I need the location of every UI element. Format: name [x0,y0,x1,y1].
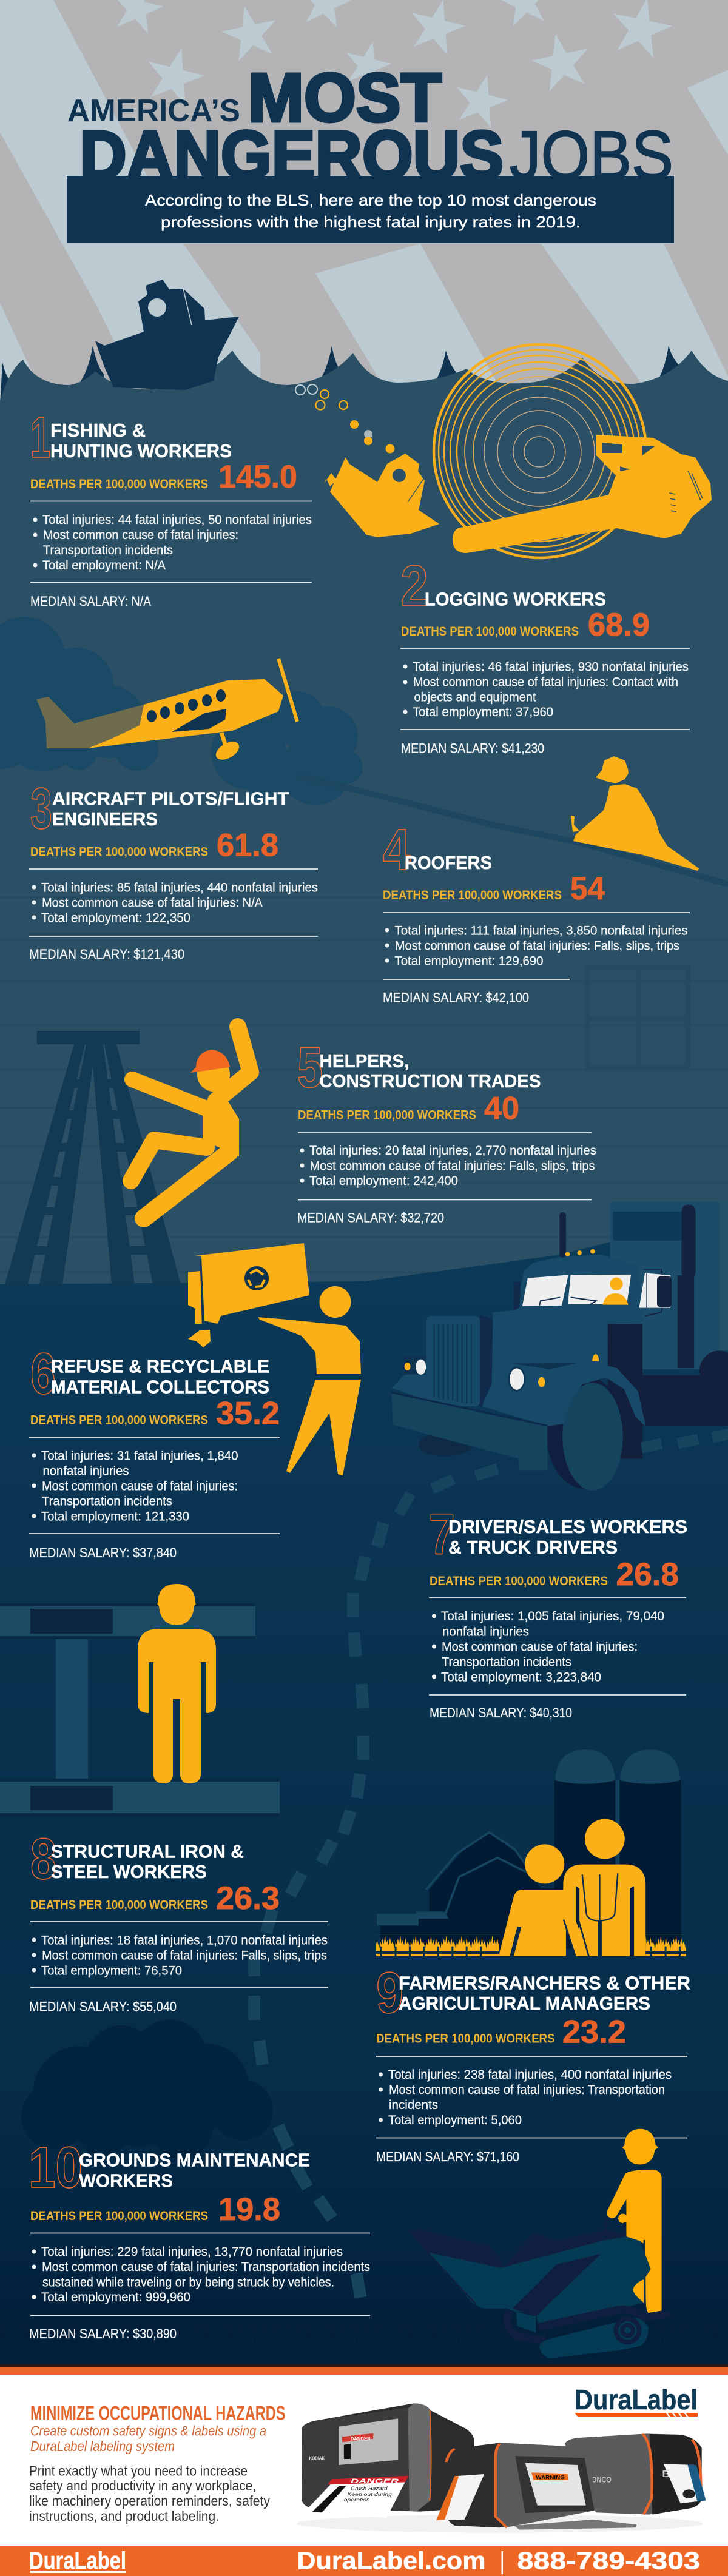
icon: steel worker [138,1584,216,1783]
rank number 9: 9 [376,1961,403,2025]
deaths value: 61.8 [217,827,278,864]
heading: HUNTING WORKERS [50,440,232,461]
heading: FARMERS/RANCHERS & OTHER [399,1972,690,1994]
rank number 4: 4 [383,817,411,882]
injury facts: Total employment: N/A [42,558,166,572]
median salary: MEDIAN SALARY: $42,100 [383,990,529,1005]
title: MOST [248,59,442,136]
clouds behind the plane [0,617,363,805]
heading [448,1516,687,1558]
injury facts: Most common cause of fatal injuries: Falls, slips, trips [395,939,679,953]
phone number: 888-789-4303 [517,2547,700,2575]
printer: Bronco front [436,2443,637,2530]
panel: driver/sales workers and truck drivers [429,1501,687,1720]
injury facts: Total employment: 121,330 [41,1510,189,1523]
rank number 8: 8 [30,1826,56,1891]
title [67,59,673,193]
panel: helpers, construction trades [297,1035,596,1225]
heading [319,1050,541,1092]
footer: contact bar [0,2546,728,2576]
injury facts: Total injuries: 31 fatal injuries, 1,840 [41,1449,238,1463]
deaths value: 35.2 [216,1396,280,1431]
deaths label: DEATHS PER 100,000 WORKERS [30,844,208,859]
injury facts [32,1933,328,1978]
deaths label: DEATHS PER 100,000 WORKERS [430,1574,608,1588]
deaths label: DEATHS PER 100,000 WORKERS [30,1897,208,1912]
injury facts: nonfatal injuries [42,1464,129,1478]
icon: chainsaw [453,435,712,553]
injury facts: Most common cause of fatal injuries: Transportation [389,2083,665,2097]
promo subheading: DuraLabel labeling system [30,2438,175,2454]
median salary: MEDIAN SALARY: N/A [30,594,151,609]
heading [50,420,232,461]
injury facts [403,660,689,719]
heading: DRIVER/SALES WORKERS [448,1516,687,1537]
deaths label: DEATHS PER 100,000 WORKERS [30,477,208,491]
promo subheading: Create custom safety signs & labels using a [30,2423,266,2439]
road dashes [248,1428,728,2298]
injury facts: Total employment: 37,960 [413,705,553,719]
heading: CONSTRUCTION TRADES [319,1070,541,1092]
injury facts [33,513,312,572]
heading: STEEL WORKERS [51,1861,207,1882]
deaths value: 23.2 [562,2014,626,2050]
icon: ladder [5,1031,181,1284]
background: grass [0,2313,728,2364]
heading: REFUSE & RECYCLABLE [51,1356,269,1377]
heading: AGRICULTURAL MANAGERS [399,1993,650,2014]
title: AMERICA’S [67,93,240,129]
panel: logging workers [400,554,690,756]
printer: Kodiak: KODIAK [309,2456,325,2461]
rank number 7: 7 [429,1501,455,1567]
injury facts [385,924,688,968]
icon: farm and farmers [376,1749,686,1957]
injury facts: Most common cause of fatal injuries: [43,528,238,542]
heading: HELPERS, [319,1050,409,1072]
icon: recycling worker [258,1286,361,1475]
injury facts [432,1609,664,1685]
icon: tree silhouette [21,2019,273,2159]
intro text box [67,176,674,243]
promo heading: MINIMIZE OCCUPATIONAL HAZARDS [30,2403,285,2424]
median salary: MEDIAN SALARY: $55,040 [29,1999,177,2014]
icon: recycling bin [188,1243,309,1347]
icon: mower worker and mower [408,2129,673,2358]
rank number 2: 2 [400,554,428,619]
printer: Bronco back: BR [662,2469,678,2479]
intro text box: professions with the highest fatal injury rates in 2019. [161,213,581,231]
printer: Bronco back [565,2433,706,2515]
heading [51,1841,244,1882]
heading: AIRCRAFT PILOTS/FLIGHT [52,788,289,809]
heading: LOGGING WORKERS [425,588,606,610]
heading [79,2149,310,2192]
footer: promo panel [0,2375,728,2546]
printers illustration [297,2403,706,2533]
logo: DuraLabel: DuraLabel [575,2384,698,2415]
heading [399,1972,690,2014]
injury facts: Total injuries: 85 fatal injuries, 440 nonfatal injuries [41,880,318,895]
injury facts: objects and equipment [414,690,536,705]
injury facts: Most common cause of fatal injuries: Falls, slips, trips [42,1949,327,1962]
printer: Kodiak: DANGER [351,2477,399,2484]
promo subheading [30,2423,266,2454]
heading [51,1356,269,1397]
printer: Bronco front: WARNING [536,2475,565,2481]
background: house siding [0,897,728,1272]
website: DuraLabel.com [297,2547,485,2575]
injury facts: incidents [389,2098,438,2112]
promo body text: like machinery operation reminders, safety [29,2493,270,2509]
panel: roofers [383,817,690,1005]
injury facts: Total injuries: 1,005 fatal injuries, 79,040 [441,1609,664,1623]
intro text box: According to the BLS, here are the top 10 most dangerous [145,191,596,209]
promo body text [29,2463,270,2524]
rank number 6: 6 [30,1341,56,1406]
injury facts: Most common cause of fatal injuries: [42,1480,238,1493]
injury facts: Total injuries: 238 fatal injuries, 400 nonfatal injuries [388,2068,672,2082]
background: sky and flag [0,0,728,400]
deaths value: 54 [570,871,605,907]
rank number 3: 3 [30,776,52,841]
title: JOBS [510,117,673,193]
deaths value: 68.9 [588,607,650,643]
injury facts: Total injuries: 44 fatal injuries, 50 nonfatal injuries [42,513,312,527]
icon: airplane [36,659,297,763]
injury facts [379,2068,672,2127]
rank number 1: 1 [30,405,50,470]
injury facts: sustained while traveling or by being struck by vehicles. [42,2275,334,2290]
injury facts: Total employment: 3,223,840 [441,1670,601,1685]
icon: fishing boat silhouette [95,280,239,390]
background: night lower section [0,1242,728,2365]
injury facts: Total employment: 122,350 [41,911,190,925]
heading: & TRUCK DRIVERS [448,1537,618,1558]
deaths value: 145.0 [218,459,297,495]
injury facts: Total employment: 5,060 [388,2113,522,2127]
printer: Kodiak [302,2403,474,2518]
heading: GROUNDS MAINTENANCE [79,2149,310,2171]
printer: Bronco back: ONCO [592,2475,612,2484]
injury facts [32,2245,370,2304]
promo body text: safety and productivity in any workplace, [29,2478,256,2494]
median salary: MEDIAN SALARY: $32,720 [297,1210,444,1225]
injury facts: Total injuries: 46 fatal injuries, 930 nonfatal injuries [413,660,689,674]
heading: FISHING & [50,420,146,441]
deaths value: 26.8 [616,1557,679,1592]
injury facts: Total employment: 242,400 [309,1174,458,1188]
deaths label: DEATHS PER 100,000 WORKERS [30,2209,208,2223]
injury facts: nonfatal injuries [442,1625,529,1639]
heading: ROOFERS [405,852,492,873]
deaths value: 26.3 [216,1880,280,1916]
panel: grounds maintenance workers [29,2135,370,2341]
injury facts: Most common cause of fatal injuries: Transportation incidents [42,2260,370,2274]
heading: STRUCTURAL IRON & [51,1841,244,1862]
deaths label: DEATHS PER 100,000 WORKERS [383,888,562,902]
footer: top band [0,2364,728,2375]
median salary: MEDIAN SALARY: $37,840 [29,1545,177,1560]
injury facts: Transportation incidents [42,1494,172,1509]
injury facts: Total injuries: 18 fatal injuries, 1,070 nonfatal injuries [41,1933,328,1948]
injury facts [32,880,318,925]
injury facts: Total employment: 999,960 [41,2290,190,2304]
heading: ENGINEERS [52,808,158,830]
injury facts: Transportation incidents [442,1655,571,1669]
panel: structural iron and steel workers [29,1826,328,2014]
injury facts [300,1144,596,1188]
injury facts: Total injuries: 20 fatal injuries, 2,770 nonfatal injuries [309,1144,596,1158]
injury facts: Total employment: 129,690 [394,954,544,968]
rank number 10: 10 [29,2135,83,2200]
injury facts: Transportation incidents [43,543,173,557]
icon: truck [391,1200,728,1491]
median salary: MEDIAN SALARY: $41,230 [401,741,544,756]
panel: fishing and hunting workers [30,405,312,609]
printer: Kodiak: Keep out during [347,2492,393,2497]
deaths value: 40 [484,1090,519,1127]
deaths label: DEATHS PER 100,000 WORKERS [376,2031,554,2046]
deaths label: DEATHS PER 100,000 WORKERS [298,1107,476,1122]
deaths label: DEATHS PER 100,000 WORKERS [401,624,579,639]
heading [52,788,289,830]
title: DANGEROUS [79,117,504,193]
icon: roofer [571,756,699,871]
house window [587,968,688,1068]
injury facts: Total injuries: 229 fatal injuries, 13,770 nonfatal injuries [41,2245,343,2259]
injury facts: Most common cause of fatal injuries: Contact with [413,676,678,689]
deaths value: 19.8 [218,2192,280,2227]
background: teal sea and house wall [0,351,728,1298]
panel: refuse and recyclable material collectors [29,1341,280,1560]
background: dark wave tips [0,346,681,406]
icon: falling worker [131,1027,251,1218]
injury facts: Total employment: 76,570 [41,1964,182,1978]
injury facts: Most common cause of fatal injuries: N/A [42,896,263,910]
injury facts [32,1449,238,1523]
icon: steel beams [0,1603,280,1817]
printer: Kodiak: Crush Hazard [351,2486,388,2492]
injury facts: Most common cause of fatal injuries: Falls, slips, trips [309,1159,595,1173]
promo body text: Print exactly what you need to increase [29,2463,248,2479]
heading: MATERIAL COLLECTORS [51,1377,269,1397]
icon: sinking ship [324,454,439,537]
deaths label: DEATHS PER 100,000 WORKERS [30,1413,208,1427]
printer: Kodiak: operation [344,2497,370,2503]
median salary: MEDIAN SALARY: $71,160 [376,2149,519,2164]
median salary: MEDIAN SALARY: $30,890 [29,2326,177,2341]
footer logo: DuraLabel [29,2547,126,2574]
panel: farmers, ranchers and other agricultural managers [376,1961,690,2164]
icon: bubbles [295,384,394,454]
injury facts: Total injuries: 111 fatal injuries, 3,850 nonfatal injuries [394,924,688,937]
rank number 5: 5 [297,1035,323,1100]
icon: tree rings log [434,344,646,558]
injury facts: Most common cause of fatal injuries: [442,1640,638,1654]
printer: Kodiak: DANGER [351,2436,371,2442]
heading: WORKERS [79,2170,173,2192]
median salary: MEDIAN SALARY: $121,430 [29,947,184,962]
promo body text: instructions, and product labeling. [29,2508,219,2524]
median salary: MEDIAN SALARY: $40,310 [430,1705,572,1720]
panel: aircraft pilots and flight engineers [29,776,318,962]
roof line of house [297,776,728,884]
